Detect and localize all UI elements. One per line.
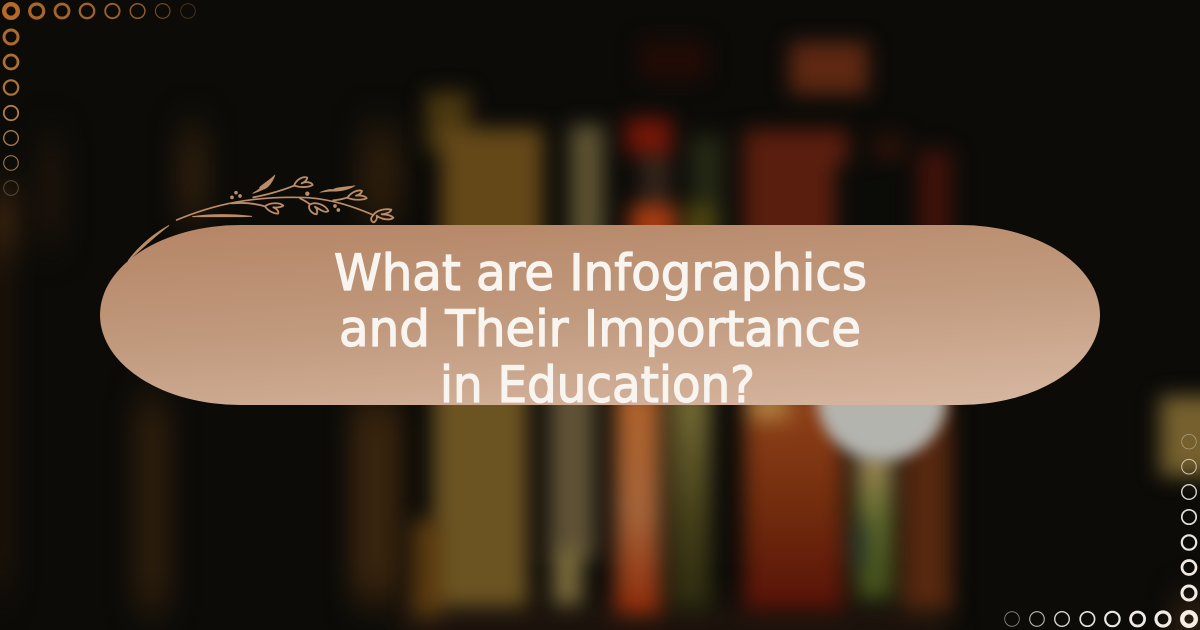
title: in Education? [440,356,755,414]
banner pill [100,225,1100,405]
title: What are Infographics [334,244,867,302]
title: and Their Importance [339,300,861,358]
